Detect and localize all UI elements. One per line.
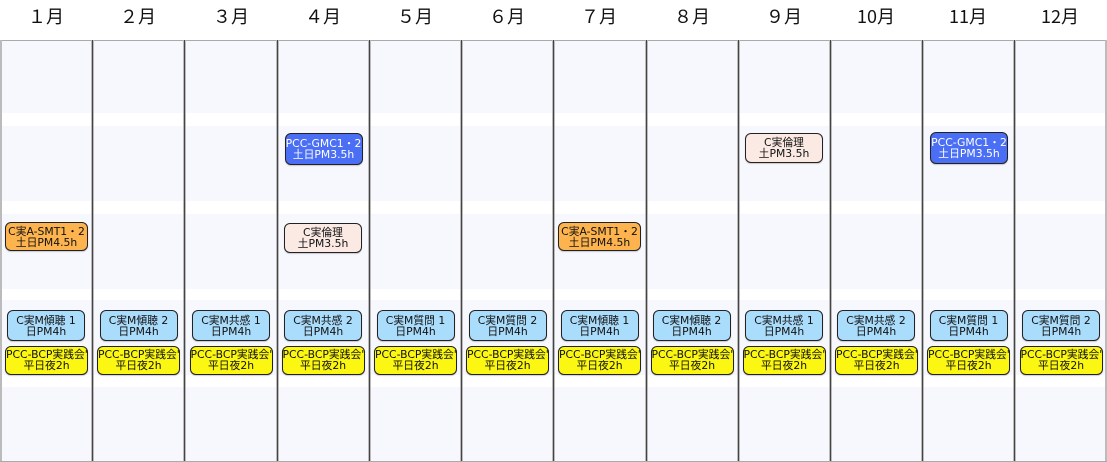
- event: C実M質問1 May: [376, 310, 454, 341]
- event: PCC-BCP August: PCC-BCP実践会': [652, 348, 733, 361]
- event: PCC-GMC November: [930, 132, 1008, 164]
- event: C実M共感2 April: [284, 310, 362, 341]
- event: C実倫理 September: 土PM3.5h: [759, 147, 809, 160]
- event: C実A-SMT July: C実A-SMT1・2: [561, 224, 638, 238]
- event: PCC-BCP September: 平日夜2h: [761, 359, 807, 372]
- event: C実M質問2 December: C実M質問 2: [1031, 314, 1091, 326]
- event: PCC-BCP October: [835, 346, 918, 374]
- event: PCC-GMC April: 土日PM3.5h: [293, 148, 354, 161]
- event: C実倫理 April: [284, 222, 362, 252]
- month header: 9月: ９月: [766, 3, 802, 29]
- event: PCC-GMC November: PCC-GMC1・2: [931, 136, 1007, 149]
- event: C実M質問2 June: C実M質問 2: [478, 314, 537, 326]
- event: PCC-BCP January: 平日夜2h: [23, 359, 70, 372]
- event: PCC-BCP September: PCC-BCP実践会': [744, 348, 825, 361]
- event: PCC-BCP August: 平日夜2h: [669, 359, 715, 372]
- event: C実倫理 September: [745, 133, 823, 163]
- event: PCC-BCP April: 平日夜2h: [300, 359, 346, 372]
- event: C実M傾聴1 July: [560, 310, 638, 341]
- event: C実M傾聴1 January: C実M傾聴 1: [16, 314, 76, 326]
- event: PCC-BCP April: [282, 346, 364, 374]
- event: C実M傾聴1 January: [7, 310, 85, 341]
- event: PCC-BCP July: PCC-BCP実践会': [559, 348, 641, 361]
- event: PCC-BCP March: PCC-BCP実践会': [190, 348, 272, 361]
- event: C実M傾聴1 January: 日PM4h: [26, 324, 66, 338]
- event: C実M質問1 May: C実M質問 1: [386, 314, 445, 326]
- month header: 3月: ３月: [213, 3, 249, 29]
- event: C実M質問1 November: [930, 310, 1008, 341]
- event: C実M傾聴2 February: [100, 310, 178, 341]
- event: C実M共感1 March: [192, 310, 270, 341]
- event: PCC-BCP October: 平日夜2h: [853, 359, 900, 372]
- event: C実M傾聴1 July: 日PM4h: [579, 324, 620, 338]
- event: PCC-BCP January: [5, 346, 88, 374]
- event: C実M質問2 December: [1022, 310, 1100, 341]
- event: C実M質問1 May: 日PM4h: [395, 324, 436, 338]
- event: C実M共感2 October: C実M共感 2: [846, 314, 906, 326]
- event: C実M共感1 September: C実M共感 1: [754, 314, 814, 326]
- event: PCC-BCP September: [742, 346, 826, 374]
- month header: 1月: １月: [28, 3, 64, 29]
- event: PCC-GMC April: [284, 133, 362, 165]
- event: PCC-BCP June: 平日夜2h: [484, 359, 531, 372]
- event: PCC-BCP November: [927, 346, 1010, 374]
- event: PCC-BCP December: PCC-BCP実践会': [1020, 348, 1102, 361]
- month header: 10月: 10月: [857, 3, 895, 29]
- event: C実M共感1 September: 日PM4h: [764, 324, 804, 338]
- event: C実M傾聴2 February: 日PM4h: [118, 324, 159, 338]
- event: C実M共感2 October: [837, 310, 915, 341]
- event: PCC-BCP April: PCC-BCP実践会': [282, 348, 364, 361]
- event: PCC-BCP November: 平日夜2h: [945, 359, 992, 372]
- event: PCC-BCP June: [466, 346, 549, 374]
- event: PCC-BCP December: 平日夜2h: [1038, 359, 1084, 372]
- event: C実M共感1 March: C実M共感 1: [201, 314, 261, 326]
- month header: 4月: ４月: [305, 3, 341, 29]
- event: C実M共感2 October: 日PM4h: [856, 324, 896, 338]
- event: C実倫理 September: C実倫理: [764, 136, 804, 149]
- event: C実M傾聴1 July: C実M傾聴 1: [570, 314, 629, 326]
- event: PCC-BCP March: 平日夜2h: [208, 359, 254, 372]
- event: PCC-BCP January: PCC-BCP実践会': [6, 348, 88, 361]
- event: PCC-BCP March: [190, 346, 272, 374]
- event: PCC-BCP July: [558, 346, 641, 374]
- event: PCC-GMC November: 土日PM3.5h: [938, 147, 1000, 160]
- event: PCC-BCP October: PCC-BCP実践会': [836, 348, 918, 361]
- event: C実M質問2 December: 日PM4h: [1041, 324, 1081, 338]
- event: C実M質問2 June: [468, 310, 546, 341]
- event: PCC-BCP July: 平日夜2h: [576, 359, 623, 372]
- event: C実A-SMT January: [5, 222, 88, 251]
- event: PCC-BCP May: PCC-BCP実践会': [375, 348, 457, 361]
- event: PCC-BCP November: PCC-BCP実践会': [928, 348, 1010, 361]
- event: PCC-BCP August: [650, 346, 734, 374]
- month header: 6月: ６月: [489, 3, 525, 29]
- month header: 12月: 12月: [1041, 3, 1079, 29]
- event: C実A-SMT July: [558, 222, 641, 251]
- event: PCC-BCP June: PCC-BCP実践会': [467, 348, 549, 361]
- event: PCC-GMC April: PCC-GMC1・2: [286, 137, 361, 150]
- event: C実倫理 April: 土PM3.5h: [298, 237, 348, 250]
- event: C実A-SMT July: 土日PM4.5h: [569, 236, 630, 248]
- event: PCC-BCP May: 平日夜2h: [392, 359, 439, 372]
- event: C実M傾聴2 August: 日PM4h: [671, 324, 712, 338]
- event: PCC-BCP February: PCC-BCP実践会': [98, 348, 180, 361]
- event: C実A-SMT January: 土日PM4.5h: [16, 236, 77, 248]
- event: PCC-BCP December: [1020, 346, 1102, 374]
- event: C実倫理 April: C実倫理: [303, 226, 343, 239]
- event: C実M質問1 November: 日PM4h: [948, 324, 989, 338]
- month header: 5月: ５月: [397, 3, 433, 29]
- event: PCC-BCP February: 平日夜2h: [115, 359, 162, 372]
- event: C実M傾聴2 August: C実M傾聴 2: [662, 314, 721, 326]
- event: C実M共感1 March: 日PM4h: [211, 324, 251, 338]
- event: C実M共感2 April: 日PM4h: [303, 324, 343, 338]
- event: C実M質問2 June: 日PM4h: [487, 324, 528, 338]
- event: C実M共感2 April: C実M共感 2: [293, 314, 353, 326]
- event: C実M傾聴2 February: C実M傾聴 2: [109, 314, 168, 326]
- event: C実M質問1 November: C実M質問 1: [939, 314, 998, 326]
- month header: 2月: ２月: [120, 3, 156, 29]
- month header: 11月: 11月: [949, 3, 987, 29]
- event: PCC-BCP May: [374, 346, 457, 374]
- event: PCC-BCP February: [97, 346, 180, 374]
- month header: 7月: ７月: [581, 3, 617, 29]
- month header: 8月: ８月: [674, 3, 710, 29]
- event: C実M共感1 September: [745, 310, 823, 341]
- event: C実M傾聴2 August: [652, 310, 730, 341]
- event: C実A-SMT January: C実A-SMT1・2: [8, 224, 85, 238]
